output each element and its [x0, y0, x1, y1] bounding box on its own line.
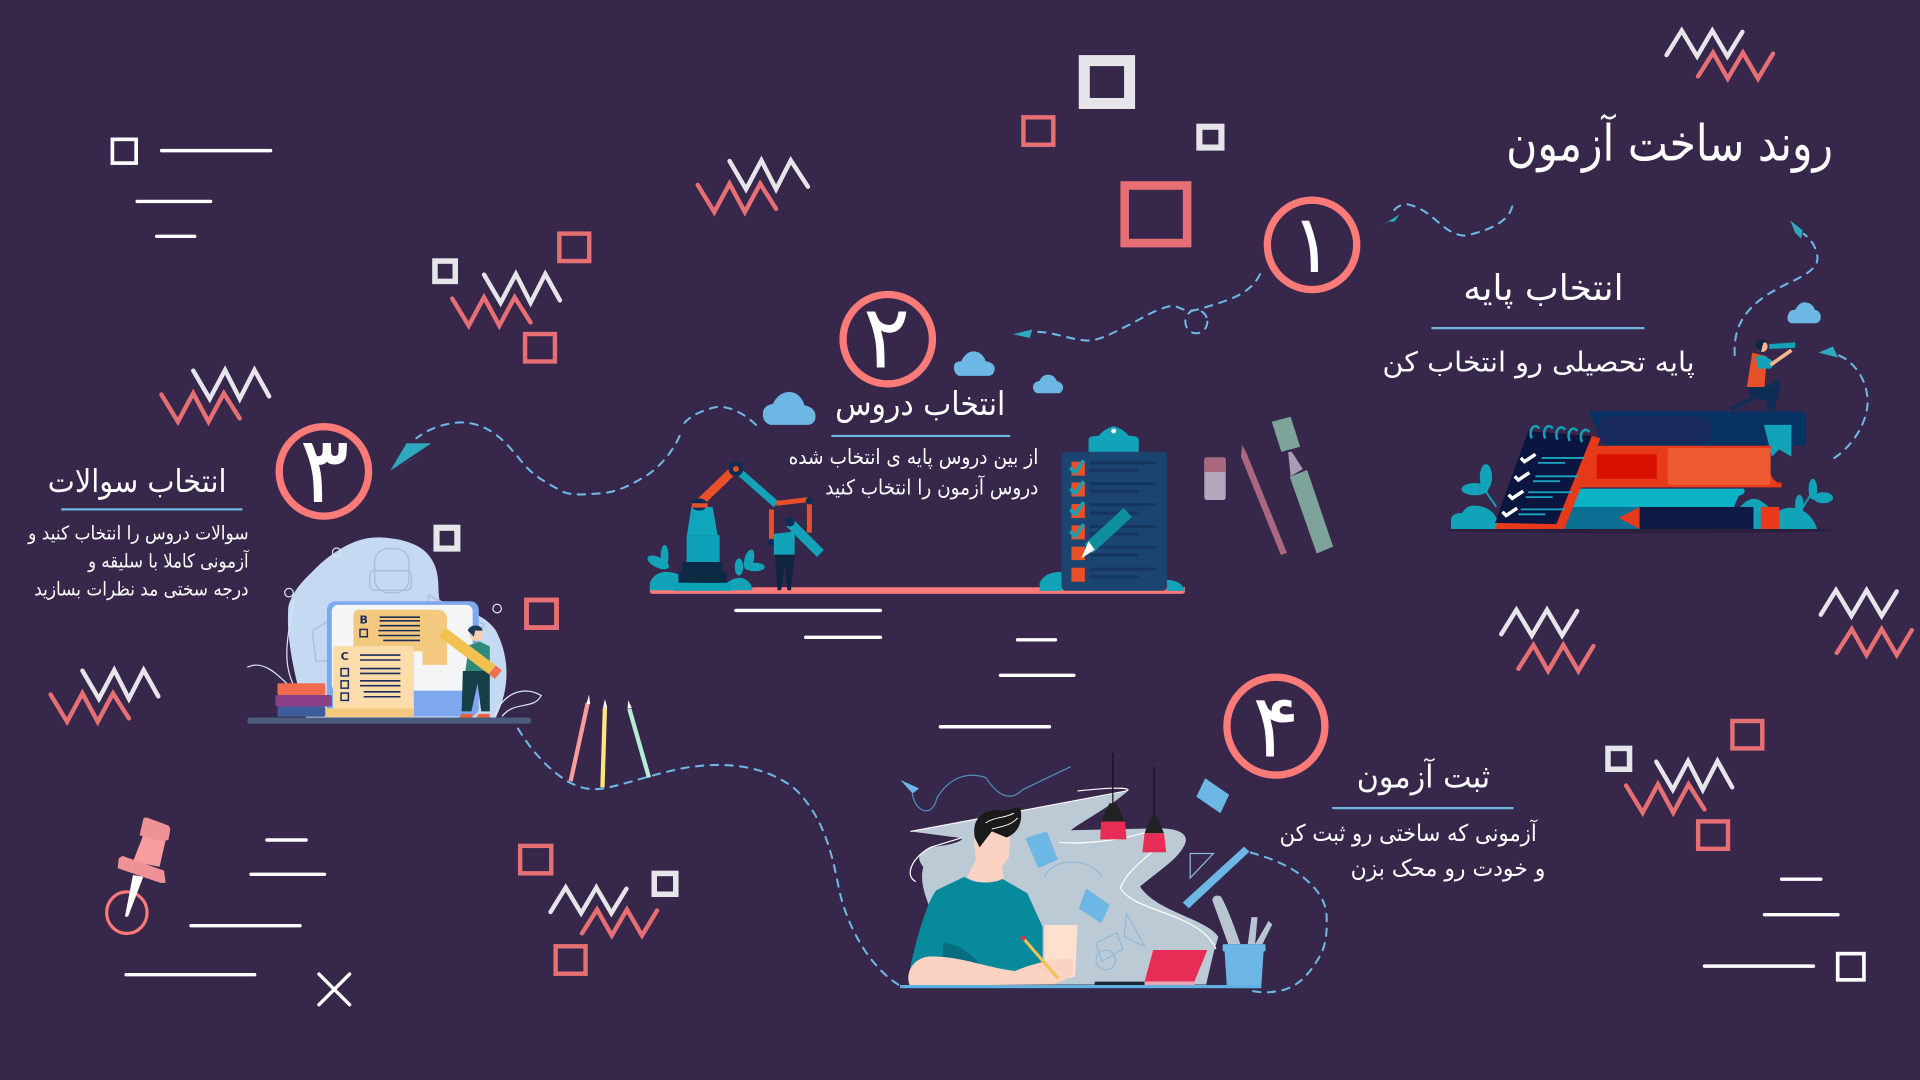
description: و خودت رو محک بزن	[1351, 855, 1545, 882]
step 1	[1267, 198, 1837, 533]
paper letter B: B	[359, 613, 368, 626]
heading: select courses: انتخاب دروس	[835, 384, 1005, 423]
colored pencils	[571, 694, 649, 787]
description	[1280, 819, 1545, 882]
description: از بین دروس پایه ی انتخاب شده	[789, 445, 1038, 469]
number circle 1	[1267, 198, 1357, 292]
icons: paper planes	[390, 214, 1838, 471]
description: آزمونی که ساختی رو ثبت کن	[1280, 819, 1538, 847]
number circle 2: ۲	[863, 285, 910, 388]
description: پایه تحصیلی رو انتخاب کن	[1382, 347, 1695, 379]
heading: select questions: انتخاب سوالات	[48, 462, 227, 500]
title: روند ساخت آزمون	[1506, 112, 1833, 173]
heading: select grade: انتخاب پایه	[1463, 268, 1624, 309]
illustration: clipboard checklist	[1040, 426, 1185, 591]
stationery: eraser pencil highlighter	[1204, 417, 1333, 555]
underline	[1431, 327, 1644, 329]
description	[789, 445, 1038, 500]
description	[27, 522, 249, 601]
description: دروس آزمون را انتخاب کنید	[825, 475, 1038, 500]
underline	[61, 508, 242, 510]
clouds	[763, 302, 1821, 425]
illustration: stacked books with man and telescope	[1445, 340, 1837, 533]
illustration: man writing at desk	[900, 753, 1272, 988]
description: آزمونی کاملا با سلیقه و	[87, 549, 249, 573]
x mark	[319, 974, 350, 1005]
number circle 4	[1227, 675, 1325, 778]
paper letter C: C	[341, 650, 349, 663]
step 2	[645, 285, 1333, 594]
number circle 3	[279, 416, 369, 524]
dashed flight paths	[416, 204, 1868, 992]
step 3	[27, 416, 649, 787]
number circle 2	[843, 285, 932, 388]
underline	[831, 435, 1010, 437]
white line decorations	[126, 151, 1838, 975]
step 4	[900, 675, 1545, 988]
heading: register exam: ثبت آزمون	[1357, 757, 1490, 795]
square decorations	[112, 61, 1864, 980]
number circle 1: ۱	[1290, 198, 1334, 292]
number circle 4: ۴	[1252, 675, 1300, 778]
number circle 3: ۳	[299, 416, 349, 524]
description: درجه سختی مد نظرات بسازید	[34, 579, 249, 601]
icon: push pin	[107, 818, 170, 933]
underline	[1332, 807, 1513, 809]
illustration: robot arm	[645, 462, 1185, 594]
description: سوالات دروس را انتخاب کنید و	[27, 522, 249, 544]
illustration: exam on screen	[247, 537, 541, 724]
